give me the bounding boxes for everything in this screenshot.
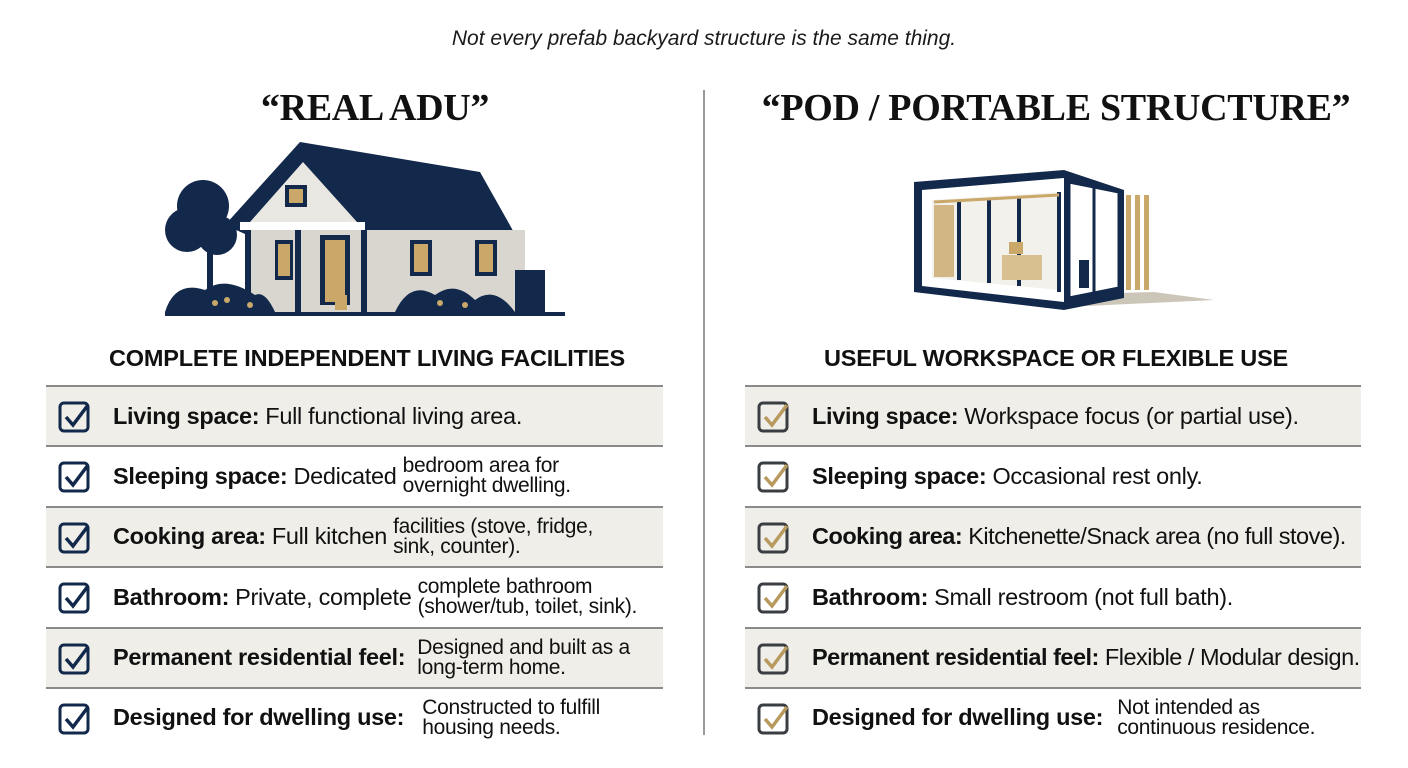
row: sleeping space: bedroom area for xyxy=(403,454,559,477)
row: cooking area: Full kitchen xyxy=(272,523,387,549)
row: dwelling use: Not intended as xyxy=(1117,696,1260,719)
row: dwelling use: Designed for dwelling use: xyxy=(113,704,404,730)
row: bathroom: (shower/tub, toilet, sink). xyxy=(418,595,637,618)
row: living space xyxy=(46,387,663,447)
row: sleeping space: Sleeping space: xyxy=(113,463,287,489)
row: living space xyxy=(745,387,1361,447)
row: bathroom xyxy=(46,568,663,629)
row: permanent feel: Flexible / Modular design. xyxy=(1105,644,1360,670)
row: dwelling use: continuous residence. xyxy=(1117,716,1315,739)
row: permanent feel: Permanent residential feel: xyxy=(113,644,405,670)
subheading: living facilities: COMPLETE INDEPENDENT LIVING FACILITIES xyxy=(109,345,625,371)
row: sleeping space: Occasional rest only. xyxy=(992,463,1203,489)
table: real ADU checklist xyxy=(46,385,663,749)
row: permanent feel xyxy=(46,629,663,689)
panel: pod xyxy=(762,87,1350,371)
row: permanent feel: Permanent residential feel: xyxy=(812,644,1099,670)
row: sleeping space xyxy=(46,447,663,508)
row: dwelling use xyxy=(58,696,600,739)
row: sleeping space xyxy=(745,447,1361,508)
table: pod checklist xyxy=(745,385,1361,749)
row: sleeping space: Sleeping space: xyxy=(812,463,986,489)
row: bathroom: Small restroom (not full bath). xyxy=(934,584,1233,610)
subheading: workspace: USEFUL WORKSPACE OR FLEXIBLE USE xyxy=(824,345,1288,371)
row: living space: Workspace focus (or partial use). xyxy=(964,402,1299,428)
row: cooking area: Cooking area: xyxy=(113,523,266,549)
row: cooking area: sink, counter). xyxy=(393,535,520,558)
icon: pod xyxy=(914,170,1214,310)
row: living space: Full functional living area. xyxy=(265,402,522,428)
tagline: Not every prefab backyard structure is the same thing. xyxy=(452,27,956,50)
title: pod: “POD / PORTABLE STRUCTURE” xyxy=(762,87,1350,129)
row: bathroom: Bathroom: xyxy=(113,584,229,610)
row: cooking area xyxy=(46,508,663,568)
row: cooking area: facilities (stove, fridge, xyxy=(393,515,593,538)
row: bathroom xyxy=(745,568,1361,629)
row: dwelling use: housing needs. xyxy=(422,716,560,739)
row: dwelling use: Constructed to fulfill xyxy=(422,696,600,719)
row: sleeping space: overnight dwelling. xyxy=(403,474,571,497)
row: bathroom: Private, complete xyxy=(235,584,412,610)
row: cooking area: Kitchenette/Snack area (no full stove). xyxy=(968,523,1346,549)
row: dwelling use: Designed for dwelling use: xyxy=(812,704,1103,730)
row: bathroom: Bathroom: xyxy=(812,584,928,610)
row: sleeping space: Dedicated xyxy=(293,463,397,489)
row: living space: Living space: xyxy=(812,402,958,428)
row: bathroom: complete bathroom xyxy=(418,575,592,598)
panel: real ADU xyxy=(109,87,625,371)
row: permanent feel: long-term home. xyxy=(417,656,566,679)
row: permanent feel xyxy=(745,629,1361,689)
row: living space: Living space: xyxy=(113,402,259,428)
title: real ADU: “REAL ADU” xyxy=(261,87,489,129)
row: permanent feel: Designed and built as a xyxy=(417,636,630,659)
divider xyxy=(703,90,705,735)
row: dwelling use xyxy=(758,696,1315,739)
row: cooking area xyxy=(745,508,1361,568)
icon: house xyxy=(165,142,565,316)
row: cooking area: Cooking area: xyxy=(812,523,962,549)
